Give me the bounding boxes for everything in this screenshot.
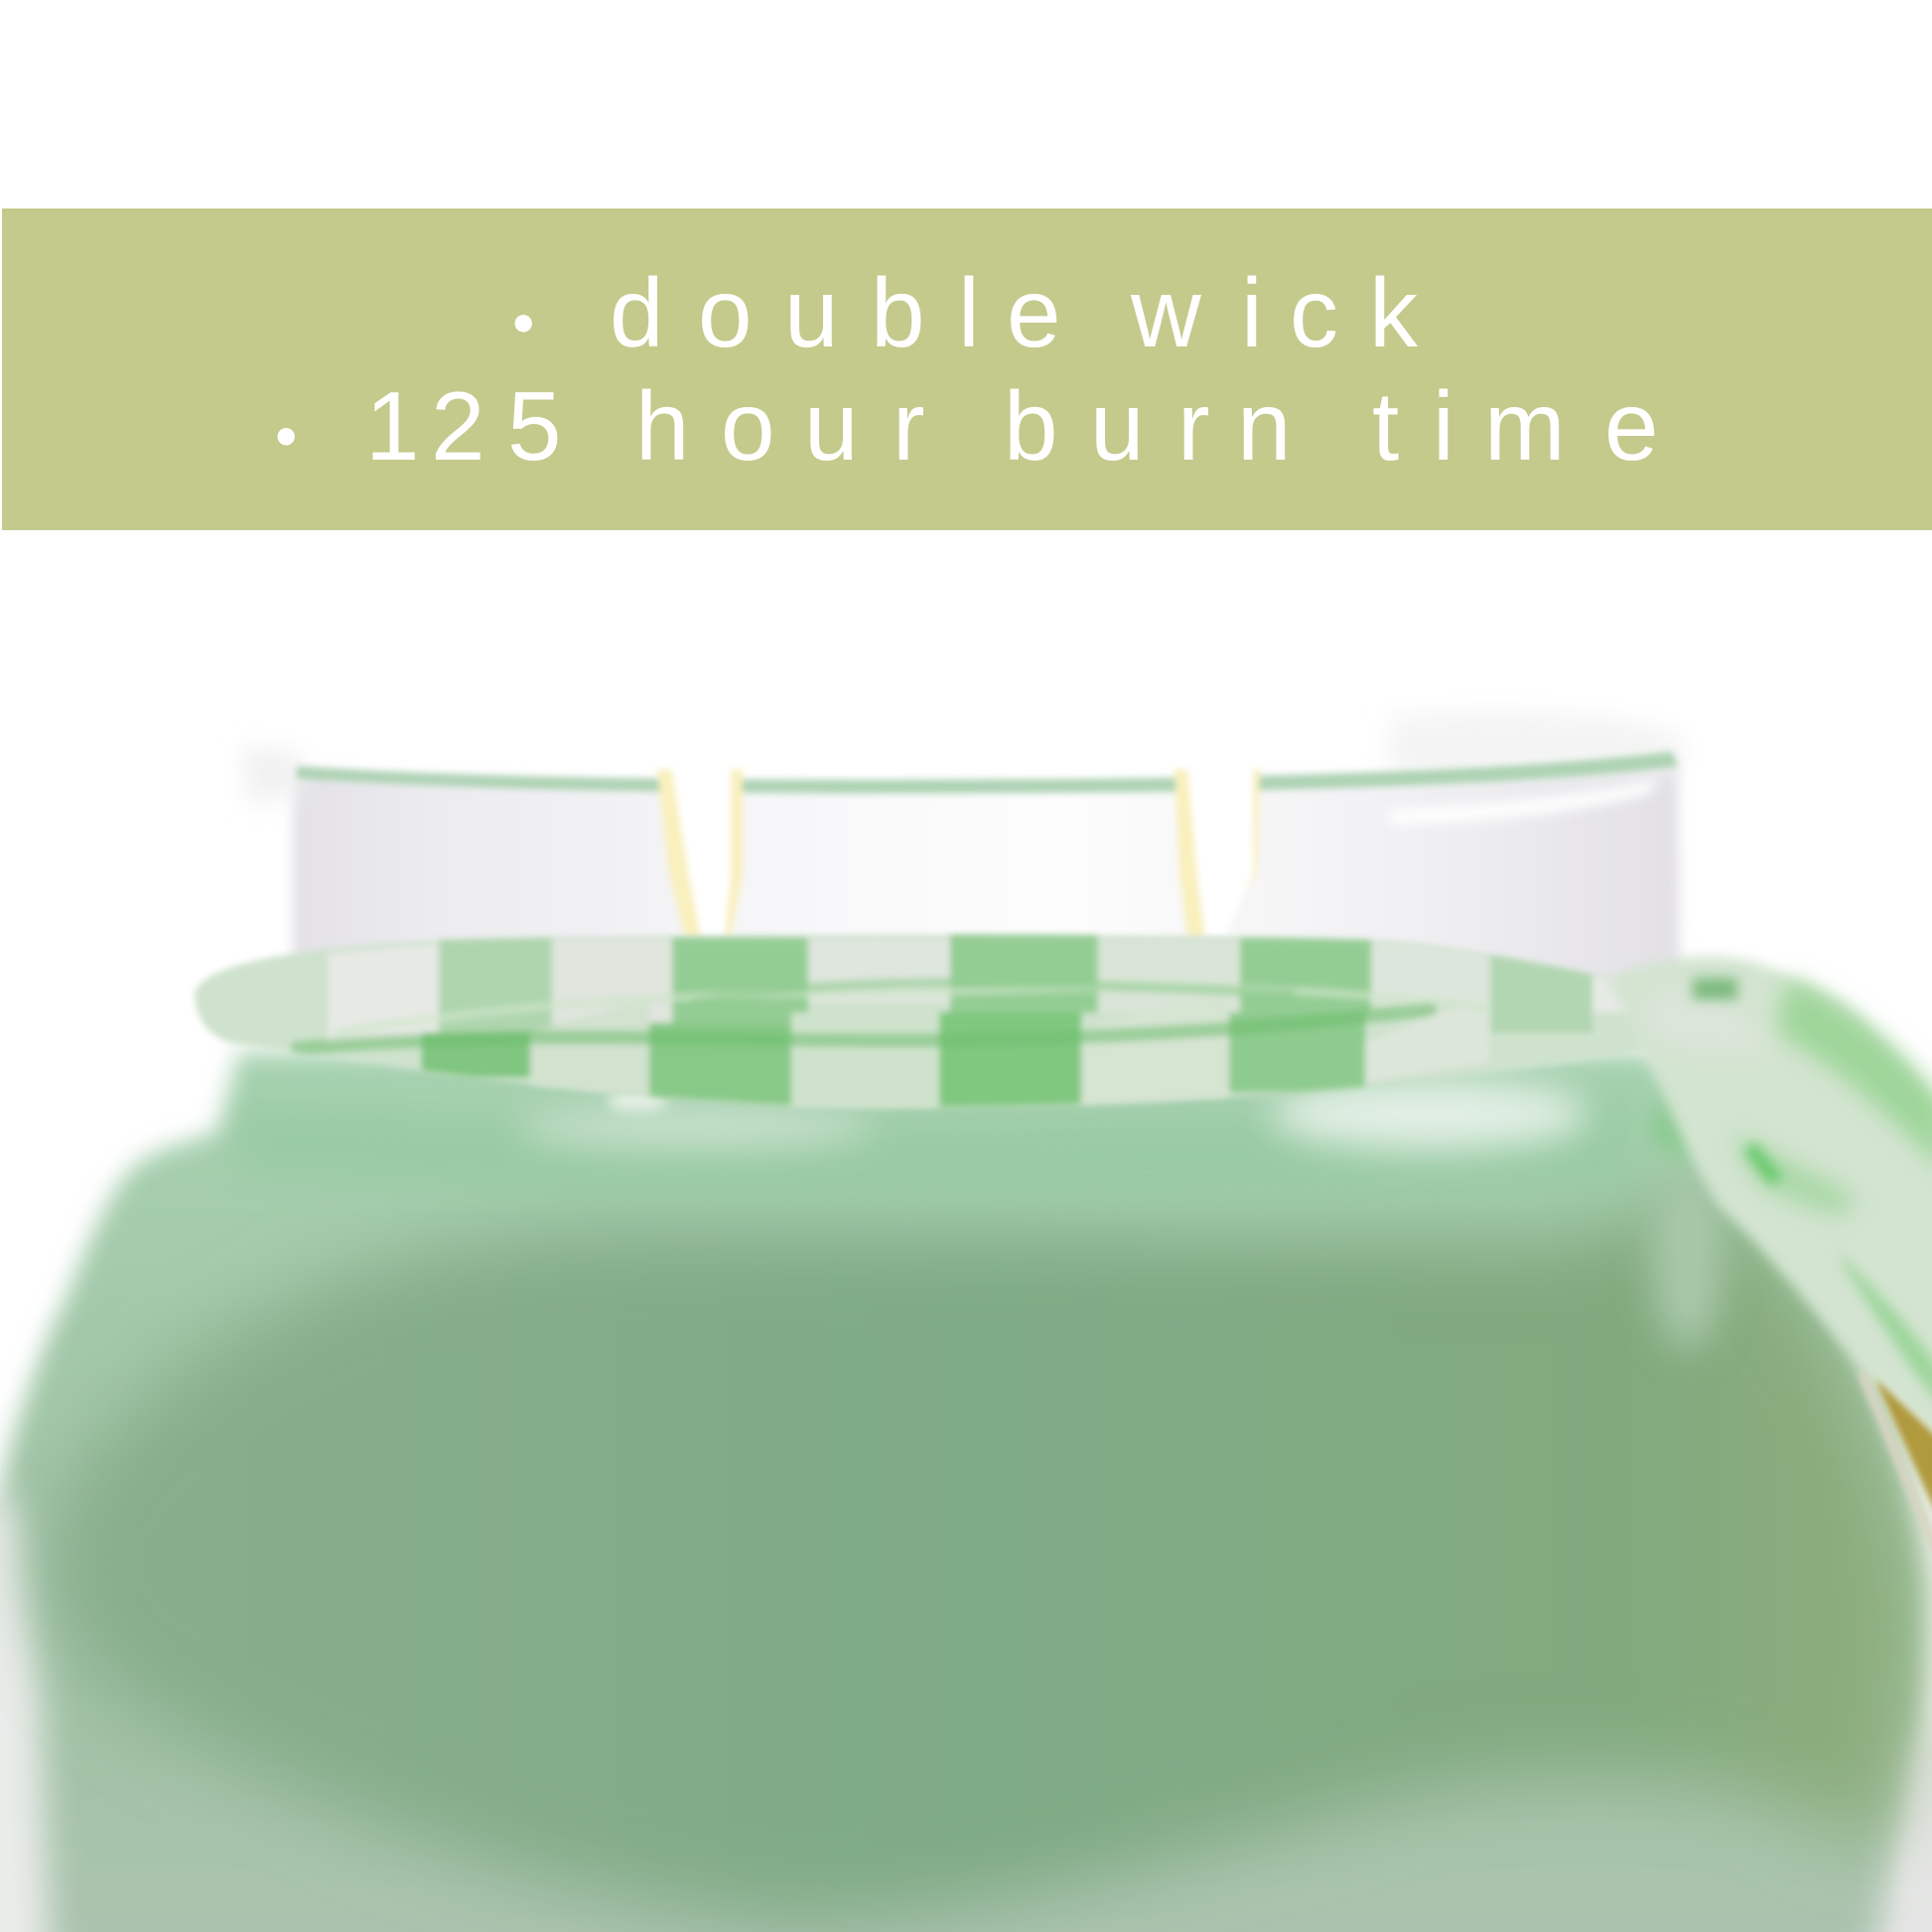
feature line: 125 hour burn time: 125 hour burn time — [365, 371, 1659, 481]
tag behind ribbon — [1862, 1372, 1932, 1554]
jar rim — [297, 752, 1678, 793]
bottom left glass edge — [0, 1469, 50, 1932]
ribbon tail on the right — [1608, 957, 1932, 1459]
wax highlights — [516, 1078, 1724, 1350]
flame: right wick — [1174, 764, 1260, 938]
ribbon folds — [298, 983, 1489, 1048]
gingham ribbon around neck — [195, 933, 1688, 1112]
feature line: double wick: • — [512, 287, 534, 358]
feature banner — [2, 208, 1932, 530]
ribbon checks — [298, 933, 1672, 1112]
wax top band — [238, 1092, 1628, 1197]
bottom right glass edge — [1871, 1688, 1932, 1932]
jar glass neck — [243, 712, 1686, 993]
feature line: double wick: double wick — [610, 258, 1419, 367]
candle jar photo — [0, 712, 1932, 1932]
darker wax area — [48, 1201, 1917, 1926]
feature line: 125 hour burn time: • — [275, 400, 297, 472]
banner background — [2, 208, 1932, 530]
flame: left wick — [657, 764, 743, 938]
candle wax body — [0, 1052, 1922, 1932]
